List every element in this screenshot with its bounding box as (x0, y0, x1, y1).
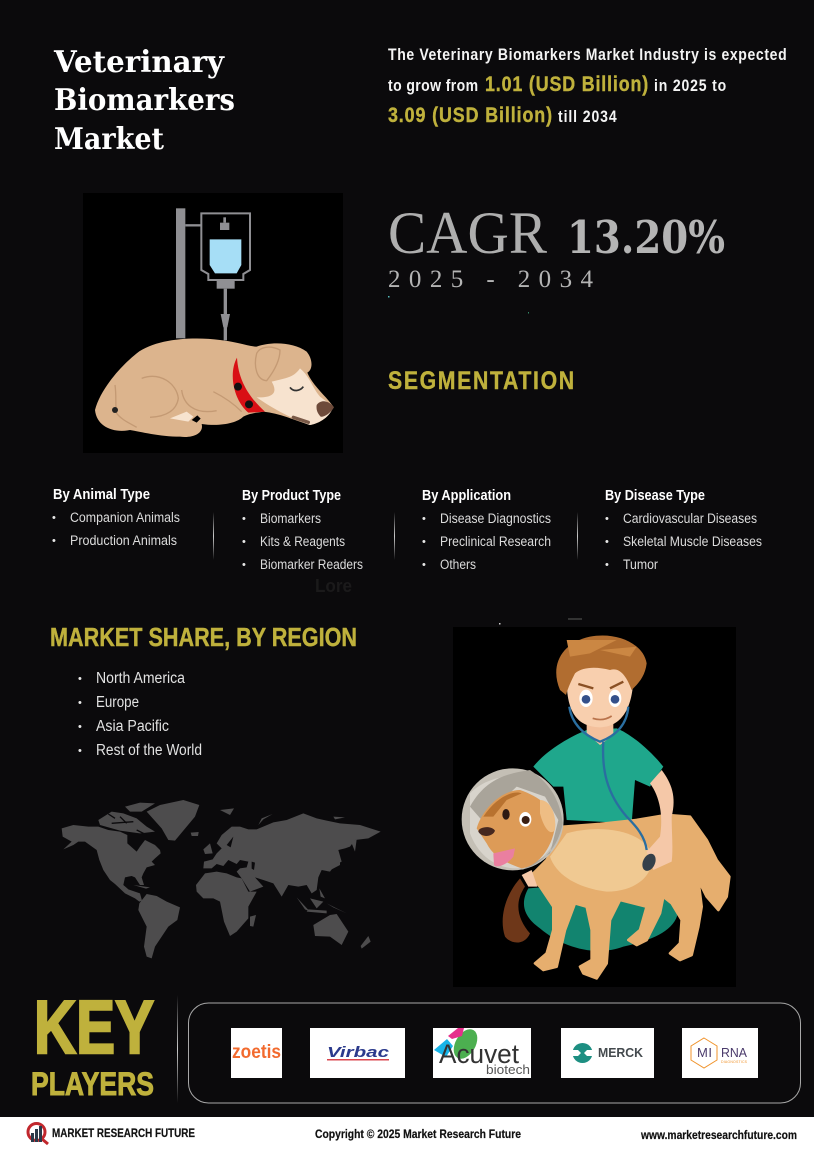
logo: virbac: Virbac (327, 1044, 390, 1061)
segment column: by animal type: By Animal Type (53, 486, 150, 503)
segment column: by disease type: Skeletal Muscle Diseases (623, 534, 762, 549)
segment column: by application (422, 487, 551, 572)
segment column: by application: Preclinical Research (440, 534, 551, 549)
icon: leash (503, 878, 530, 943)
logo: mirna (682, 1028, 758, 1078)
region list: North America (96, 670, 185, 687)
icon: dog body (530, 815, 729, 978)
icon: stethoscope (569, 707, 647, 850)
icon: IV bag (185, 213, 250, 340)
region list: • (78, 697, 82, 709)
segment column: by product type: Biomarkers (260, 511, 321, 526)
region list: Rest of the World (96, 742, 202, 759)
CAGR figure: CAGR (388, 200, 547, 266)
segment column: by product type: • (242, 536, 246, 548)
title (53, 45, 235, 157)
segment column: by animal type (52, 486, 180, 548)
segment column: by application: • (422, 536, 426, 548)
logo: acuvet biotech: biotech (486, 1062, 530, 1077)
logo: zoetis: zoetis (232, 1042, 281, 1063)
logo: acuvet biotech (433, 1025, 531, 1078)
heading: key players: PLAYERS (31, 1066, 154, 1102)
region list: Asia Pacific (96, 718, 169, 735)
region list: • (78, 745, 82, 757)
segment column: by animal type: Production Animals (70, 533, 177, 548)
title: Veterinary (53, 45, 226, 80)
segment column: by application: By Application (422, 487, 511, 504)
market forecast text: in 2025 to (654, 77, 726, 95)
CAGR figure: 13.20% (567, 211, 725, 264)
segment column: by disease type: By Disease Type (605, 487, 705, 504)
footer bar: MARKET RESEARCH FUTURE (52, 1126, 195, 1140)
icon: vet neck and head (556, 636, 647, 745)
heading: segmentation: SEGMENTATION (388, 366, 574, 394)
segment column: by disease type: Tumor (623, 557, 658, 572)
icon: dog head (477, 790, 555, 868)
market forecast text (388, 46, 787, 127)
panel: sleeping dog with IV drip (83, 193, 343, 453)
segment column: by application: • (422, 513, 426, 525)
segment column: by product type: Kits & Reagents (260, 534, 345, 549)
heading: key players (31, 985, 154, 1102)
icon: vet left hand (522, 870, 537, 887)
icon: IV pole (176, 208, 185, 338)
icon: vet shirt (533, 728, 663, 823)
world map (62, 800, 381, 958)
region list (78, 670, 202, 759)
segment column: by disease type: Cardiovascular Diseases (623, 511, 757, 526)
segment column: by animal type: Companion Animals (70, 510, 180, 525)
footer bar: Copyright © 2025 Market Research Future (315, 1127, 521, 1141)
faint stray text: Lore (315, 576, 352, 596)
logo: mirna: DIAGNOSTICS (721, 1060, 748, 1064)
market forecast text: The Veterinary Biomarkers Market Industry is expected (388, 46, 787, 64)
segment column: by application: Disease Diagnostics (440, 511, 551, 526)
heading: key players: KEY (34, 985, 154, 1069)
segment column: by disease type (605, 487, 762, 572)
logo: mirna: RNA (721, 1045, 747, 1060)
market forecast text: 3.09 (USD Billion) (388, 104, 552, 127)
title: Market (54, 122, 164, 157)
segment column: by animal type: • (52, 512, 56, 524)
title: Biomarkers (54, 83, 235, 118)
icon: dog (95, 339, 334, 437)
logo: mirna: MI (697, 1045, 712, 1060)
icon: elizabethan cone (462, 768, 564, 870)
panel: key player logos (188, 1003, 800, 1103)
logo: zoetis (231, 1028, 282, 1078)
icon: vet trousers (524, 887, 678, 951)
segment column: by product type: By Product Type (242, 487, 341, 504)
CAGR figure: 2025 - 2034 (388, 266, 594, 293)
segment column: by product type: • (242, 559, 246, 571)
icon: market research future logo (28, 1124, 48, 1144)
segment column: by product type: Biomarker Readers (260, 557, 363, 572)
segment column: by disease type: • (605, 513, 609, 525)
market forecast text: till 2034 (558, 108, 617, 126)
panel: vet examining dog (453, 627, 736, 987)
market forecast text: 1.01 (USD Billion) (485, 73, 648, 96)
footer bar (0, 1117, 814, 1150)
CAGR figure (388, 200, 725, 293)
heading: market share by region: MARKET SHARE, BY REGION (50, 624, 357, 652)
region list: • (78, 673, 82, 685)
segment column: by application: Others (440, 557, 476, 572)
logo: merck (561, 1028, 654, 1078)
icon: dog chest fur highlight (550, 829, 652, 892)
logo: virbac (310, 1028, 405, 1078)
icon: vet arm and hand (640, 770, 674, 873)
segment column: by disease type: • (605, 536, 609, 548)
segment column: by product type: • (242, 513, 246, 525)
region list: • (78, 721, 82, 733)
market forecast text: to grow from (388, 77, 478, 95)
region list: Europe (96, 694, 139, 711)
logo: merck: MERCK (598, 1045, 644, 1060)
segment column: by application: • (422, 559, 426, 571)
segment column: by product type (242, 487, 363, 572)
segment column: by animal type: • (52, 535, 56, 547)
logo: acuvet biotech: Acuvet (439, 1039, 519, 1069)
segment column: by disease type: • (605, 559, 609, 571)
